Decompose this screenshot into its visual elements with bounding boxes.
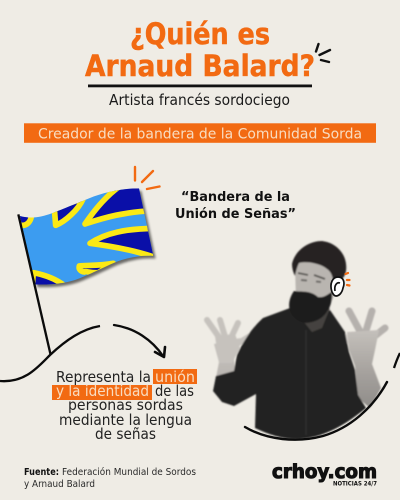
flag navy shapes xyxy=(20,188,154,284)
face xyxy=(295,256,335,312)
highlight: unión xyxy=(153,369,197,384)
icon: ear xyxy=(331,277,344,296)
description xyxy=(52,368,197,443)
title: ¿Quién es xyxy=(130,17,270,51)
source: y Arnaud Balard xyxy=(24,479,95,490)
description: de las xyxy=(155,382,194,400)
description: de señas xyxy=(95,425,156,443)
icon: title sparkle xyxy=(316,44,330,62)
icon: ear burst xyxy=(346,273,350,286)
description: personas sordas xyxy=(68,396,183,414)
title: Arnaud Balard? xyxy=(85,49,315,83)
description: mediante la lengua xyxy=(59,411,192,429)
banner: Creador de la bandera de la Comunidad Sorda xyxy=(38,126,362,142)
icon: orange burst xyxy=(135,167,160,189)
quote: “Bandera de la xyxy=(181,190,290,205)
eyes and brows xyxy=(298,273,325,279)
quote: Unión de Señas” xyxy=(175,207,296,222)
flag illustration xyxy=(15,180,162,355)
arrow xyxy=(114,325,165,357)
flag shadow xyxy=(22,191,156,287)
right forearm and hand xyxy=(341,311,385,408)
flag pole xyxy=(18,214,51,355)
title underline xyxy=(88,84,312,87)
hair xyxy=(292,241,346,281)
left forearm and hand xyxy=(207,320,250,388)
title xyxy=(85,17,315,83)
flag cloth xyxy=(20,188,154,284)
curved line xyxy=(0,326,100,381)
neck xyxy=(304,308,330,332)
beard xyxy=(289,291,332,323)
shirt xyxy=(213,308,366,439)
description: unión xyxy=(155,368,195,386)
person photo xyxy=(207,241,385,439)
right edge curve xyxy=(394,353,400,368)
quote xyxy=(175,190,296,222)
description: Representa la xyxy=(56,368,151,386)
description: y la identidad xyxy=(56,382,149,400)
source: Federación Mundial de Sordos xyxy=(62,467,196,478)
logo: crhoy.com xyxy=(272,462,377,483)
subtitle: Artista francés sordociego xyxy=(109,91,290,109)
shirt buttons placket xyxy=(305,330,307,435)
highlight: y la identidad xyxy=(52,385,152,400)
source xyxy=(24,467,196,490)
arc under person xyxy=(245,382,387,440)
logo: NOTICIAS 24/7 xyxy=(333,480,377,488)
source: Fuente: xyxy=(24,467,59,478)
